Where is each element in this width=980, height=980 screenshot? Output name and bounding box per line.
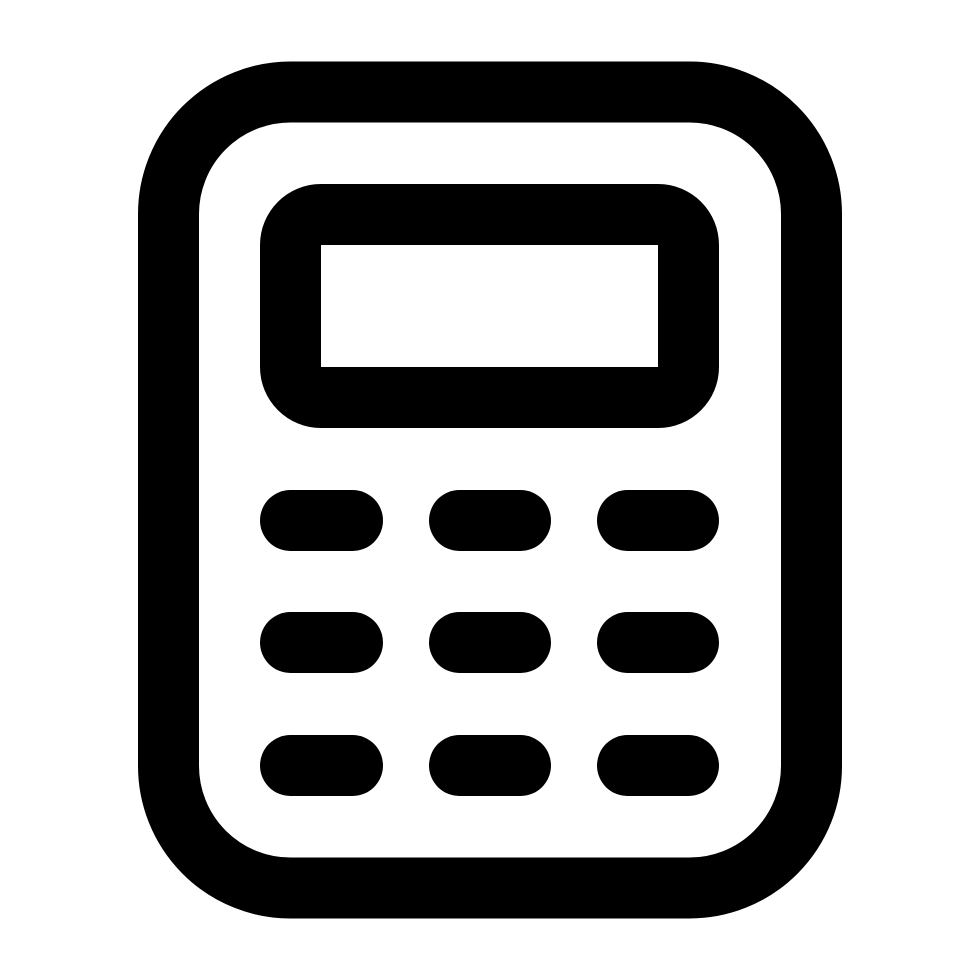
calculator body outline: [168, 92, 812, 888]
calculator buttons: [260, 490, 719, 796]
icon: calculator: [168, 92, 812, 888]
calculator display: [260, 184, 719, 428]
